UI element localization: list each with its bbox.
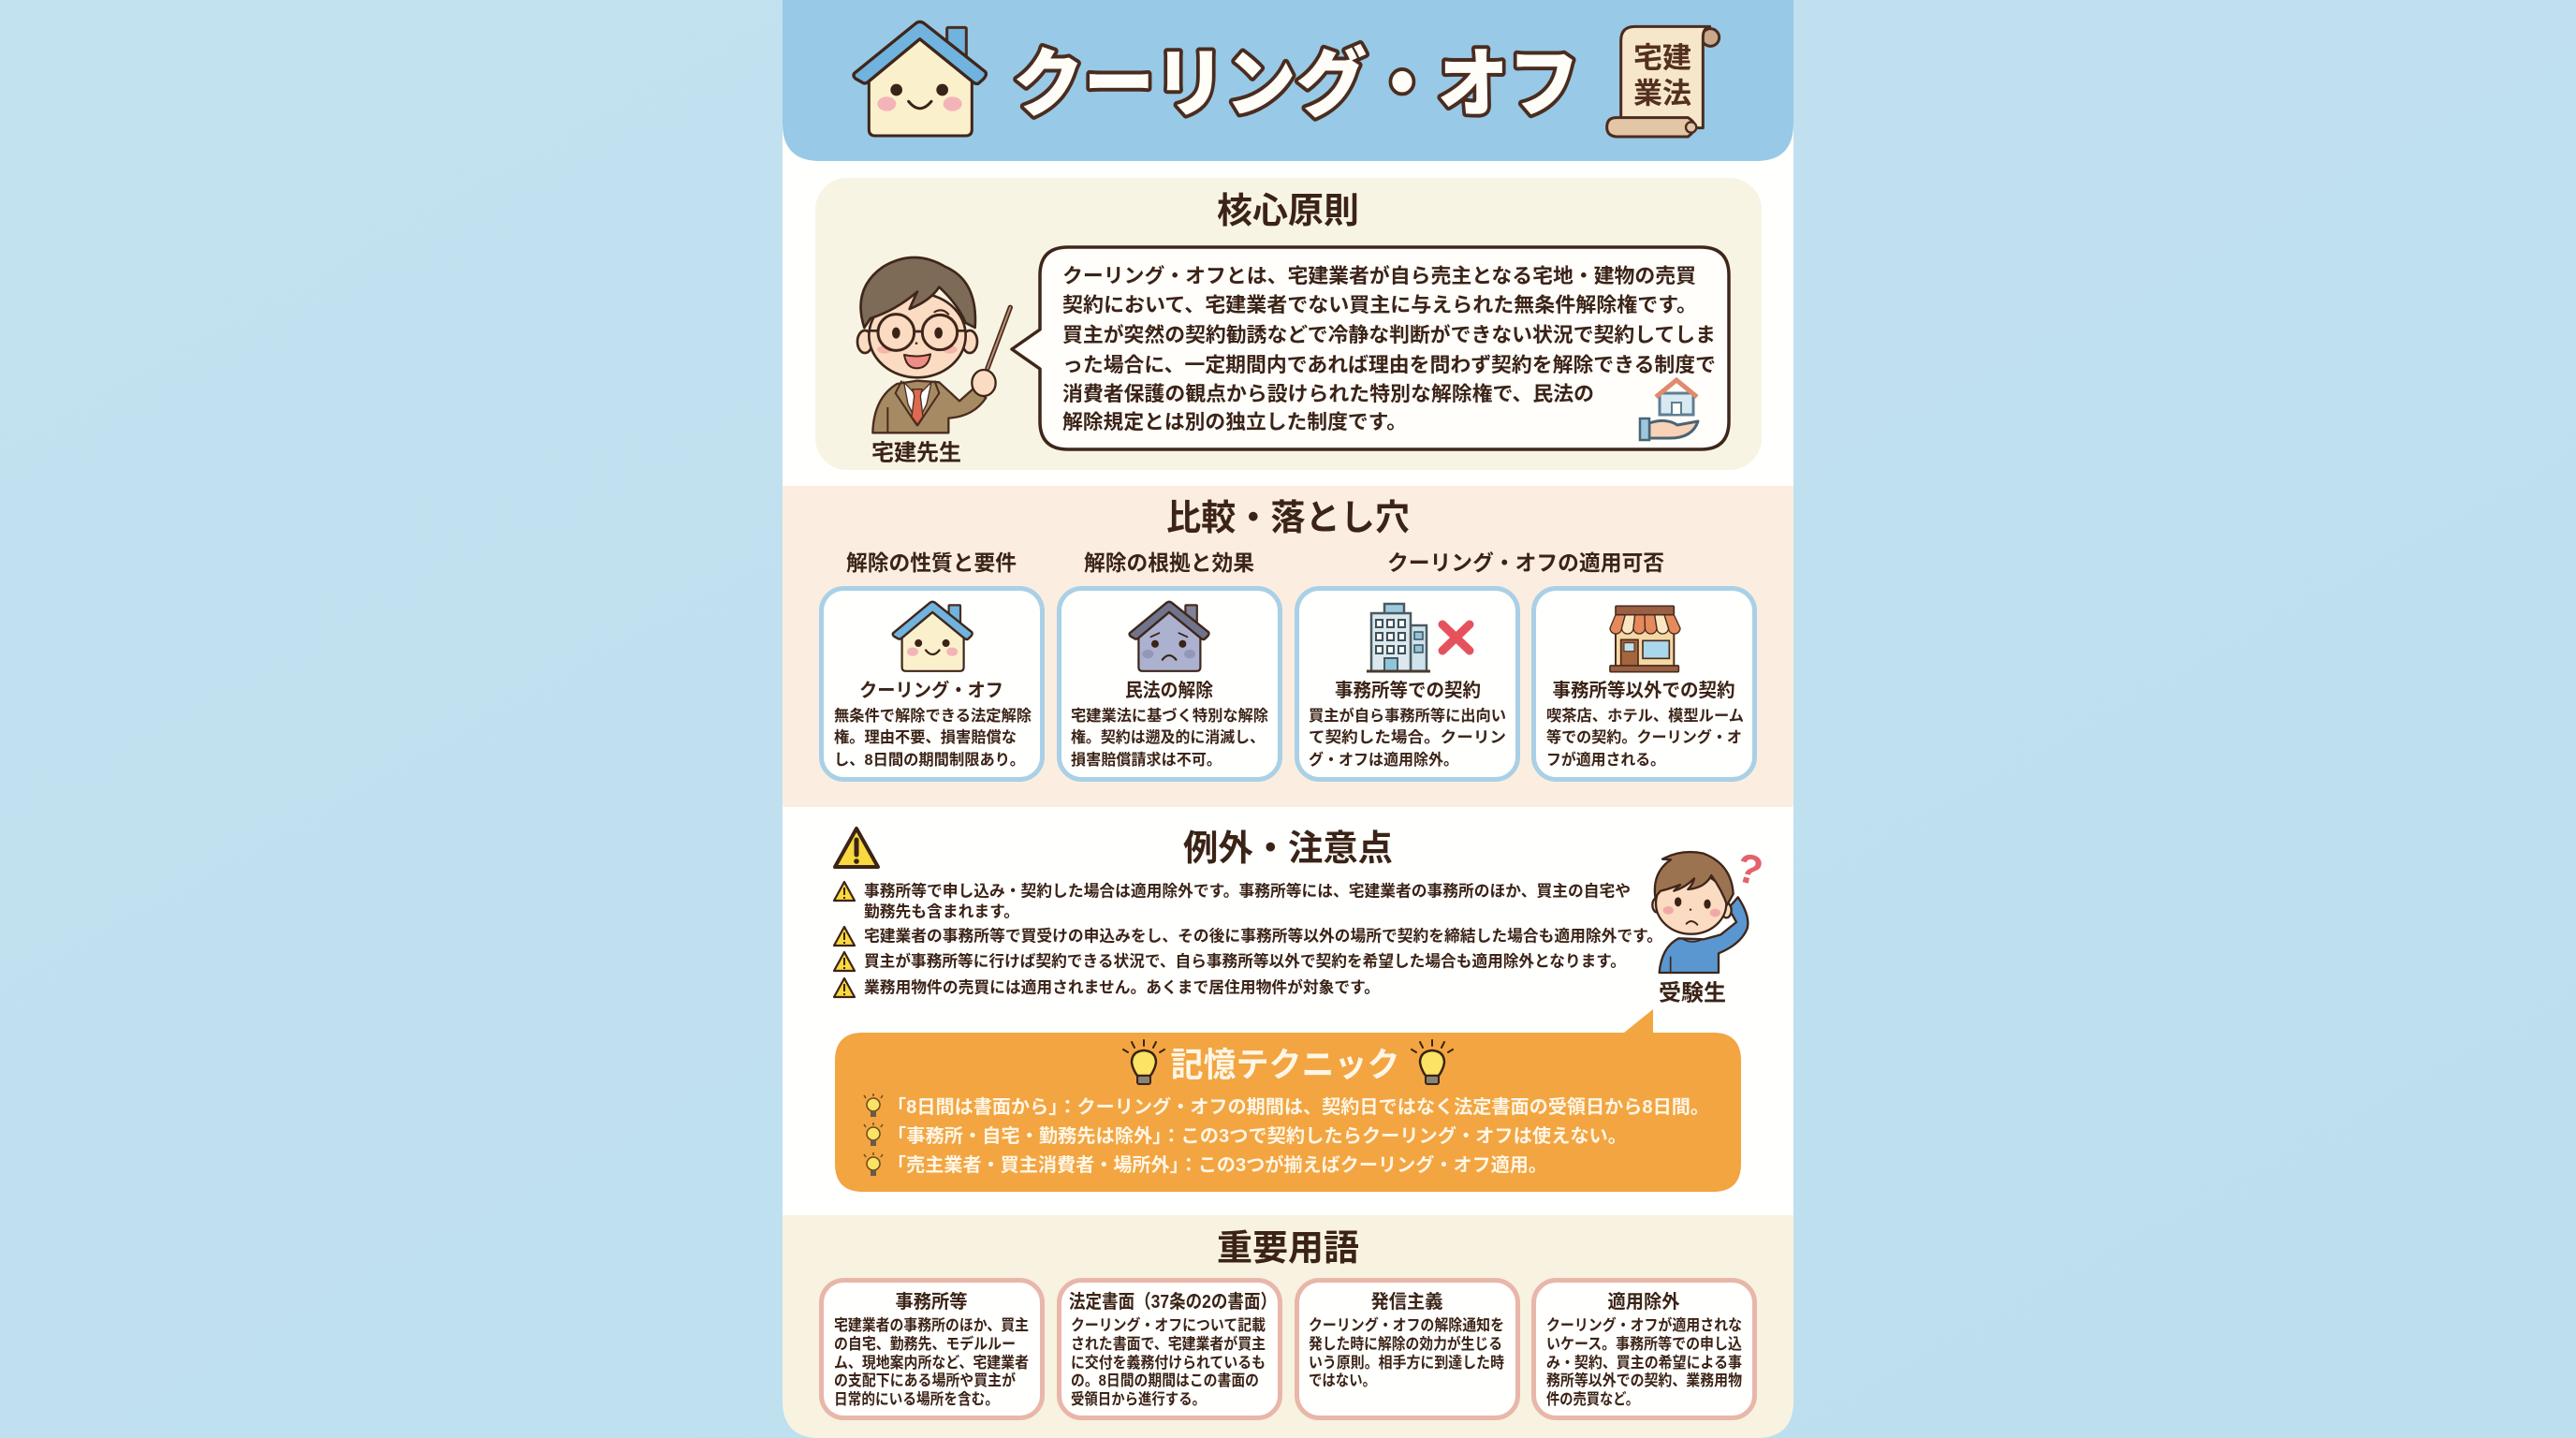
principle text: 契約において、宅建業者でない買主に与えられた無条件解除権です。 <box>1062 294 1697 316</box>
label: student: 受験生 <box>1659 981 1726 1005</box>
card text <box>834 706 1032 769</box>
warning list: 業務用物件の売買には適用されません。あくまで居住用物件が対象です。 <box>864 977 1380 996</box>
card: civil law rescission <box>1060 588 1281 779</box>
icon: law scroll: 業法 <box>1633 77 1691 110</box>
term text: 日常的にいる場所を含む。 <box>834 1390 999 1408</box>
icon: teacher <box>857 257 1010 433</box>
card title: 民法の解除 <box>1125 680 1213 701</box>
card text: 損害賠償請求は不可。 <box>1071 750 1222 769</box>
term title: 適用除外 <box>1608 1291 1679 1313</box>
principle text <box>1062 264 1716 433</box>
title: クーリング・オフ <box>1013 43 1579 125</box>
icon: store <box>1610 606 1680 672</box>
card title: 事務所等での契約 <box>1335 680 1481 701</box>
speech bubble <box>1012 247 1729 449</box>
card text: 等での契約。クーリング・オ <box>1546 727 1742 746</box>
icon: happy house <box>893 602 973 671</box>
term text: 務所等以外での契約、業務用物 <box>1546 1371 1742 1389</box>
icon: house on hand <box>1640 380 1698 440</box>
principle text: クーリング・オフとは、宅建業者が自ら売主となる宅地・建物の売買 <box>1062 264 1696 287</box>
card text: 権。契約は遡及的に消滅し、 <box>1071 728 1265 746</box>
card text <box>1071 707 1268 769</box>
memory tips: 「事務所・自宅・勤務先は除外」：この3つで契約したらクーリング・オフは使えない。 <box>887 1124 1627 1147</box>
card text: グ・オフは適用除外。 <box>1309 750 1458 769</box>
warning list: 勤務先も含まれます。 <box>864 902 1019 921</box>
card text <box>1309 706 1506 769</box>
subheading 2: 解除の根拠と効果 <box>1084 550 1254 575</box>
heading: 重要用語 <box>1217 1229 1359 1269</box>
card text: 無条件で解除できる法定解除 <box>834 706 1032 725</box>
principle text: 消費者保護の観点から設けられた特別な解除権で、民法の <box>1062 383 1594 405</box>
term text: ム、現地案内所など、宅建業者 <box>834 1354 1029 1372</box>
term text: の支配下にある場所や買主が <box>834 1371 1016 1389</box>
term text: 件の売買など。 <box>1546 1390 1639 1408</box>
term text: み・契約、買主の希望による事 <box>1546 1353 1742 1372</box>
panel: exceptions and cautions <box>834 829 1767 1192</box>
term card: statutory document <box>1060 1281 1281 1417</box>
principle text: った場合に、一定期間内であれば理由を問わず契約を解除できる制度で <box>1062 354 1716 376</box>
icon: law scroll: 宅建 <box>1633 41 1691 75</box>
term text: いケース。事務所等での申し込 <box>1546 1334 1742 1353</box>
term text: ではない。 <box>1309 1372 1376 1389</box>
icon: smiling house <box>854 22 986 136</box>
subheading 1: 解除の性質と要件 <box>846 550 1017 575</box>
term title: 法定書面（37条の2の書面） <box>1069 1291 1277 1313</box>
warning list: 事務所等で申し込み・契約した場合は適用除外です。事務所等には、宅建業者の事務所のほか、買主の自宅や <box>864 882 1631 901</box>
term card: dispatch principle <box>1297 1281 1518 1417</box>
card: cooling off <box>822 588 1043 779</box>
card text <box>1546 706 1744 769</box>
panel: comparison and pitfalls <box>783 486 1793 807</box>
term text <box>1309 1315 1504 1389</box>
card text: 買主が自ら事務所等に出向い <box>1309 706 1506 725</box>
term title: 事務所等 <box>895 1291 968 1313</box>
icon: student <box>1652 844 1767 973</box>
term text: に交付を義務付けられているも <box>1071 1354 1266 1372</box>
heading: 例外・注意点 <box>1183 829 1393 869</box>
card text: 権。理由不要、損害賠償な <box>834 728 1017 746</box>
panel: key terms <box>783 1215 1793 1438</box>
term text: 受領日から進行する。 <box>1071 1390 1206 1408</box>
icon: large warning <box>835 829 878 867</box>
term text: クーリング・オフについて記載 <box>1071 1315 1266 1334</box>
header band <box>783 0 1793 161</box>
label: teacher name: 宅建先生 <box>871 440 961 466</box>
principle text: 解除規定とは別の独立した制度です。 <box>1062 411 1407 433</box>
warning list: 買主が事務所等に行けば契約できる状況で、自ら事務所等以外で契約を希望した場合も適用除外となります。 <box>864 951 1626 970</box>
icon: bulb left <box>1123 1040 1164 1084</box>
term text <box>1546 1315 1742 1408</box>
term text: いう原則。相手方に到達した時 <box>1309 1353 1504 1372</box>
card text: 宅建業法に基づく特別な解除 <box>1071 707 1268 725</box>
card title: クーリング・オフ <box>859 679 1003 701</box>
term text <box>1071 1315 1266 1408</box>
main sheet <box>783 0 1793 1438</box>
icon: bulb right <box>1412 1040 1453 1084</box>
subheading 3: クーリング・オフの適用可否 <box>1387 550 1664 575</box>
heading: 核心原則 <box>1217 192 1359 231</box>
card: contract at office <box>1297 588 1518 779</box>
warning list: 宅建業者の事務所等で買受けの申込みをし、その後に事務所等以外の場所で契約を締結した場合も適用除外です。 <box>864 927 1662 946</box>
icon: law scroll <box>1607 26 1720 137</box>
card text: て契約した場合。クーリン <box>1309 728 1506 746</box>
card text: し、8日間の期間制限あり。 <box>834 751 1025 769</box>
card text: フが適用される。 <box>1546 750 1665 769</box>
card title: 事務所等以外での契約 <box>1552 680 1735 701</box>
heading: 比較・落とし穴 <box>1166 499 1410 538</box>
panel: memory technique <box>835 1009 1741 1192</box>
icon: cross mark <box>1442 624 1470 651</box>
panel: core principle <box>815 178 1762 470</box>
term text: 宅建業者の事務所のほか、買主 <box>834 1316 1029 1334</box>
term card: exclusions <box>1533 1281 1754 1417</box>
term title: 発信主義 <box>1370 1291 1443 1313</box>
memory tips <box>864 1093 1709 1176</box>
term text <box>834 1316 1029 1408</box>
term text: 発した時に解除の効力が生じる <box>1309 1334 1502 1353</box>
icon: student: ? <box>1732 844 1767 895</box>
card text: 喫茶店、ホテル、模型ルーム <box>1546 706 1744 725</box>
warning list <box>834 882 1662 997</box>
term card: office etc <box>822 1281 1043 1417</box>
term text: された書面で、宅建業者が買主 <box>1071 1334 1266 1353</box>
term text: の。8日間の期間はこの書面の <box>1071 1371 1259 1389</box>
term text: クーリング・オフの解除通知を <box>1309 1315 1504 1334</box>
memory tips: 「8日間は書面から」：クーリング・オフの期間は、契約日ではなく法定書面の受領日から8日間。 <box>887 1095 1709 1118</box>
memory tips: 「売主業者・買主消費者・場所外」：この3つが揃えばクーリング・オフ適用。 <box>887 1153 1547 1176</box>
term text: クーリング・オフが適用されな <box>1546 1315 1742 1334</box>
icon: sad house <box>1130 602 1208 671</box>
term text: の自宅、勤務先、モデルルー <box>834 1334 1016 1353</box>
heading: 記憶テクニック <box>1170 1045 1400 1084</box>
icon: office building <box>1367 604 1430 671</box>
card: contract outside office <box>1533 588 1754 779</box>
principle text: 買主が突然の契約勧誘などで冷静な判断ができない状況で契約してしま <box>1062 323 1716 346</box>
